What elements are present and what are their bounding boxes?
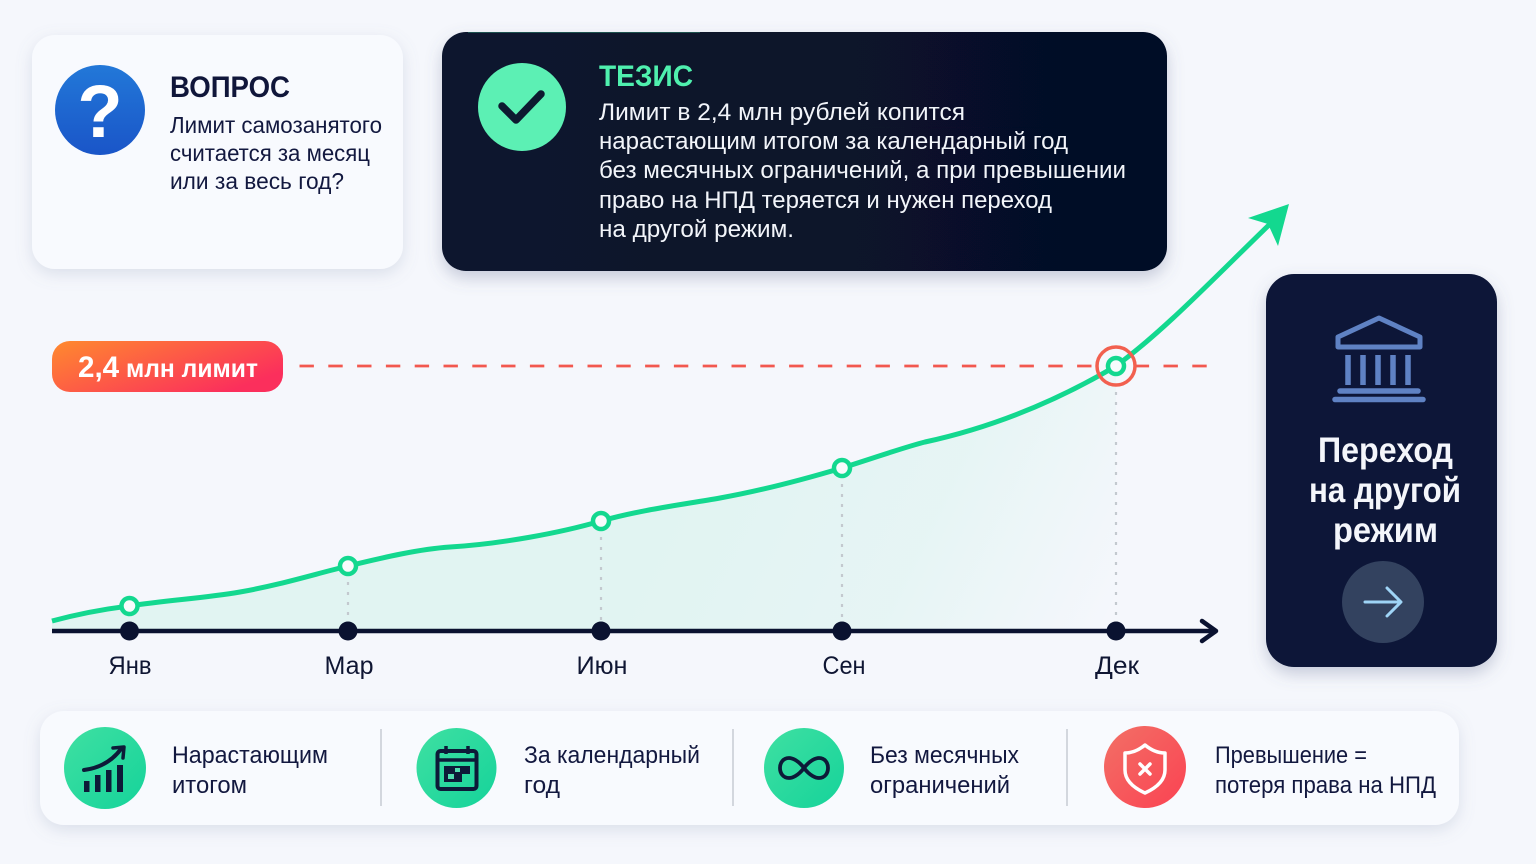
text: cumulative: итогом — [172, 772, 247, 799]
text: thesis body: право на НПД теряется и нужен переход — [599, 187, 1052, 214]
item: excess loss — [1104, 726, 1436, 808]
text: calendar year — [524, 742, 700, 799]
month labels — [108, 652, 1140, 680]
text: excess loss — [1215, 742, 1436, 799]
heading: thesis: ТЕЗИС — [599, 60, 693, 93]
icon: growth chart — [64, 727, 146, 809]
heading: question: ВОПРОС — [170, 71, 290, 104]
chart area fill — [52, 366, 1116, 631]
drop lines — [348, 392, 1116, 620]
icon: arrow button — [1342, 561, 1424, 643]
month labels: Июн — [576, 652, 628, 680]
limit badge: 2,4 млн лимит — [78, 351, 258, 384]
chart: cumulative income — [52, 204, 1289, 680]
text: excess loss: Превышение = — [1215, 742, 1367, 769]
limit badge — [52, 341, 283, 392]
curve markers — [122, 358, 1124, 614]
text: question body: считается за месяц — [170, 140, 370, 166]
text: calendar year: год — [524, 772, 560, 799]
month labels: Мар — [324, 652, 374, 680]
axis — [52, 621, 1216, 641]
text: thesis body: без месячных ограничений, а при превышении — [599, 157, 1126, 184]
axis dots — [120, 622, 1126, 640]
icon: question mark: ? — [77, 70, 123, 153]
item: calendar year — [416, 728, 700, 808]
month labels: Дек — [1095, 652, 1140, 680]
text: thesis body: на другой режим. — [599, 216, 794, 243]
text: no monthly limits: ограничений — [870, 772, 1010, 799]
text: question body — [170, 112, 382, 194]
month labels: Янв — [108, 652, 152, 680]
growth curve — [52, 222, 1272, 621]
text: calendar year: За календарный — [524, 742, 700, 769]
text: no monthly limits — [870, 742, 1019, 799]
heading: transition — [1309, 431, 1461, 550]
text: cumulative: Нарастающим — [172, 742, 328, 769]
text: thesis body — [599, 99, 1126, 243]
heading: transition: Переход — [1318, 431, 1453, 470]
text: cumulative — [172, 742, 328, 799]
text: thesis body: нарастающим итогом за календарный год — [599, 128, 1068, 155]
text: question body: или за весь год? — [170, 168, 344, 194]
icon: calendar — [416, 728, 496, 808]
icon: check mark — [478, 63, 566, 151]
panel: thesis — [442, 32, 1167, 271]
panel: key points strip — [40, 711, 1459, 825]
icon: infinity — [764, 728, 844, 808]
icon: question mark — [55, 65, 145, 155]
text: thesis body: Лимит в 2,4 млн рублей копится — [599, 99, 965, 126]
item: cumulative — [64, 727, 328, 809]
text: question body: Лимит самозанятого — [170, 112, 382, 138]
icon: shield — [1104, 726, 1186, 808]
limit crossing ring — [1097, 347, 1135, 385]
month labels: Сен — [822, 652, 866, 680]
arrow head — [1248, 204, 1289, 246]
text: no monthly limits: Без месячных — [870, 742, 1019, 769]
heading: transition: режим — [1333, 511, 1438, 550]
panel: transition — [1266, 274, 1497, 667]
icon: bank building — [1335, 318, 1423, 400]
text: excess loss: потеря права на НПД — [1215, 772, 1436, 799]
item: no monthly limits — [764, 728, 1019, 808]
panel: question — [32, 35, 403, 269]
limit line — [300, 365, 1207, 367]
heading: transition: на другой — [1309, 471, 1461, 510]
